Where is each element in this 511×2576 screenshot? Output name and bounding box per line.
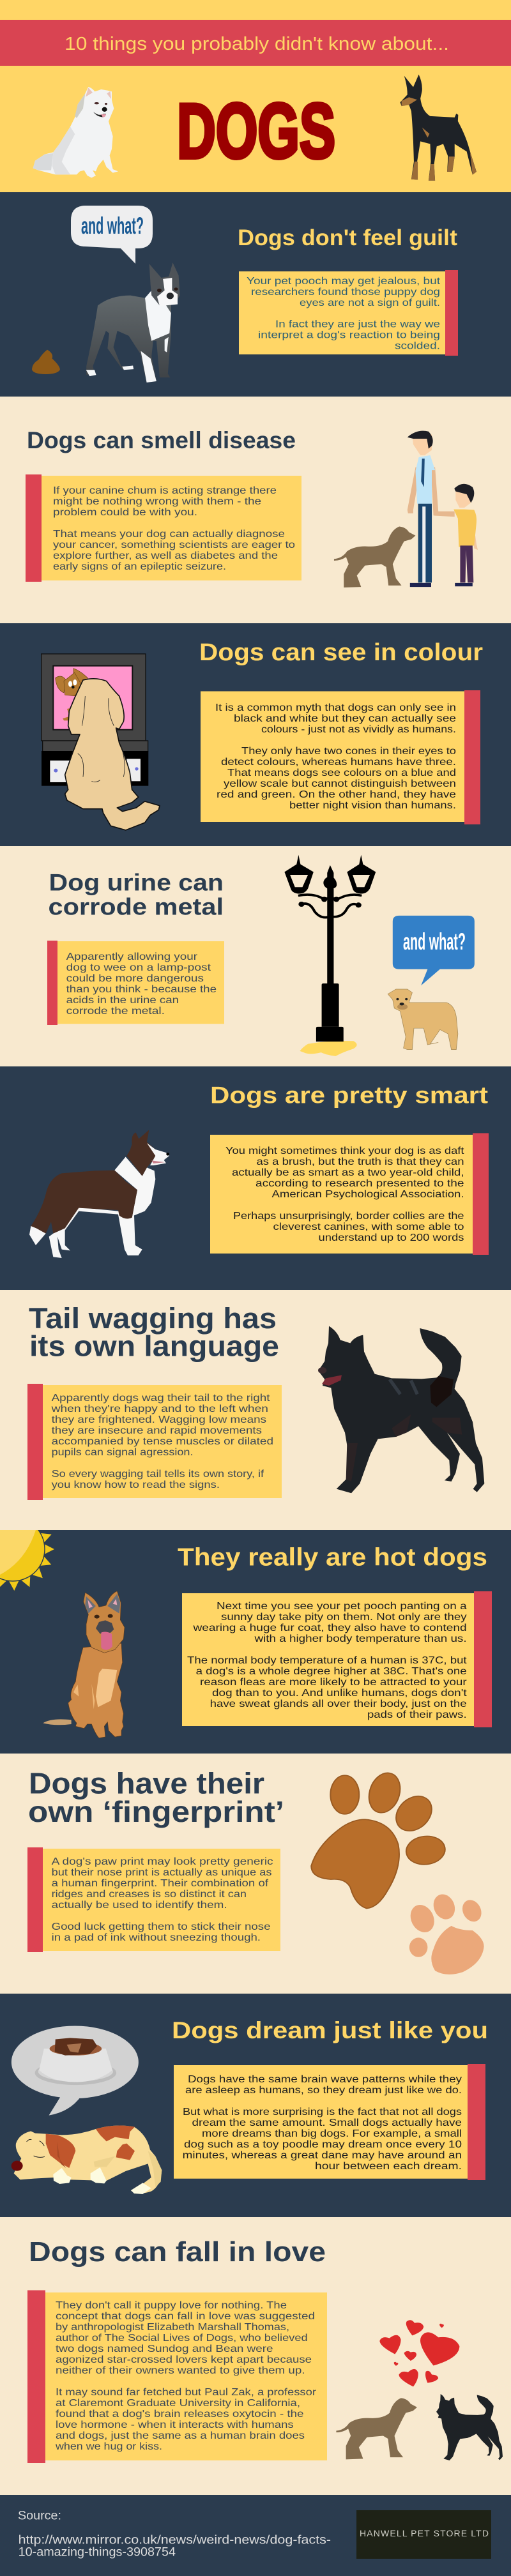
text box: are asleep as humans, so they dream just like we do. [185, 2085, 462, 2096]
text box: That means dogs see colours on a blue and [227, 768, 456, 778]
text box: in a pad of ink without sneezing though. [52, 1932, 261, 1943]
panel: dogs are pretty smart [0, 1066, 511, 1290]
text box: black and white but they can actually see [234, 713, 456, 724]
source text [18, 2510, 331, 2559]
text box: American Psychological Association. [272, 1189, 464, 1200]
heading: Dogs are pretty smart [210, 1082, 488, 1109]
icon: sun [0, 1530, 54, 1591]
text box: ridges and creases is so distinct it can [52, 1889, 247, 1900]
panel: dogs don't feel guilt [0, 192, 511, 397]
panel: tail wagging has its own language [0, 1290, 511, 1530]
text box: by anthropologist Elizabeth Marshall Thomas, [56, 2322, 289, 2333]
panel: dogs can smell disease [0, 397, 511, 623]
text box: In fact they are just the way we [275, 319, 440, 330]
heading: own ‘fingerprint’ [28, 1795, 284, 1828]
icon: border collie [29, 1130, 169, 1258]
text box: understand up to 200 words [318, 1232, 464, 1243]
text box: found that a dog's brain releases oxytocin - the [56, 2409, 304, 2420]
text box: Next time you see your pet pooch panting on a [217, 1601, 467, 1612]
text box: hour between each dream. [315, 2161, 462, 2172]
icon: thought bubble with food bowl [11, 2026, 139, 2116]
text box: scolded. [395, 341, 440, 351]
panel: footer [0, 2495, 511, 2576]
heading: corrode metal [49, 894, 224, 920]
icon: brown dog [336, 2398, 417, 2459]
text box [174, 2064, 485, 2180]
source text: 10-amazing-things-3908754 [19, 2546, 176, 2559]
icon: large brown paw print [311, 1771, 449, 1909]
text box: when we hug or kiss. [55, 2441, 162, 2452]
text box: You might sometimes think your dog is as daft [225, 1146, 464, 1156]
text box [27, 2290, 327, 2463]
text box: your cancer, something scientists are eager to [53, 540, 295, 550]
icon: tan dog [388, 989, 458, 1050]
text box: minutes, whereas a great dane may have around an [183, 2150, 462, 2161]
panel: header [0, 0, 511, 192]
text box: neither of their owners wanted to give them up. [56, 2365, 305, 2376]
icon: black dog [436, 2394, 503, 2460]
text box: The normal body temperature of a human is 37C, but [187, 1655, 467, 1666]
text box: agonized star-crossed lovers kept apart because [56, 2354, 312, 2365]
panel: they really are hot dogs [0, 1530, 492, 1738]
heading: Dogs have their [29, 1766, 264, 1799]
text box: wearing a huge fur coat, they also have to contend [192, 1623, 467, 1633]
text box: Good luck getting them to stick their nose [52, 1921, 271, 1932]
text box: Apparently allowing your [66, 951, 198, 962]
text box [182, 1591, 492, 1727]
text box: It may sound far fetched but Paul Zak, a professor [56, 2387, 317, 2398]
text box: dog such as a toy poodle may dream once every 10 [184, 2139, 462, 2150]
text box: when they're happy and to the left when [50, 1404, 268, 1414]
text box: at Claremont Graduate University in California, [56, 2398, 300, 2409]
source text: Source: [18, 2510, 61, 2523]
text box: actually be used to identify them. [52, 1900, 227, 1911]
text box: So every wagging tail tells its own story, if [52, 1469, 264, 1480]
heading: Dogs dream just like you [172, 2017, 488, 2043]
speech bubble: and what? [71, 206, 153, 264]
heading: They really are hot dogs [178, 1544, 487, 1572]
panel: dogs have their own fingerprint [0, 1754, 511, 1994]
icon: small peach paw print [407, 1893, 484, 1974]
text box: They don't call it puppy love for nothing. The [56, 2300, 287, 2311]
text box: dog than to you. And unlike humans, dogs don't [212, 1688, 467, 1699]
icon: urine puddle [300, 1041, 357, 1056]
icon: man, boy and brown dog [334, 431, 478, 587]
text box: more dreams than big dogs. For example, a small [202, 2128, 462, 2139]
text box: as a brush, but the truth is that they can [257, 1156, 464, 1167]
text box: but their nose print is actually as unique as [52, 1867, 271, 1878]
icon: boston terrier dog [86, 262, 180, 383]
text box: A dog's paw print may look pretty generic [52, 1856, 273, 1867]
text box: and dogs, just the same as a human brain does [56, 2430, 305, 2441]
text box: might be nothing wrong with them - the [53, 496, 261, 507]
text box: Dogs have the same brain wave patterns while they [188, 2074, 462, 2085]
icon: dog watching television [42, 654, 160, 830]
title: DOGS [177, 87, 335, 174]
text box [239, 270, 458, 356]
heading [49, 870, 224, 920]
text box: a dog's is a whole degree higher at 38C. That's one [196, 1666, 467, 1677]
heading: Dogs can smell disease [27, 427, 296, 453]
heading: Tail wagging has [29, 1302, 277, 1335]
text box: pupils can signal agression. [52, 1447, 193, 1458]
speech bubble: and what?: and what? [81, 213, 144, 239]
text box: If your canine chum is acting strange there [53, 485, 277, 496]
heading: Dog urine can [49, 870, 224, 895]
text box: two dogs named Sundog and Bean were [56, 2344, 273, 2354]
text box: red and green. On the other hand, they have [217, 789, 456, 800]
text box: they are frightened. Wagging low means [52, 1414, 266, 1425]
text box: a human fingerprint. Their combination of [52, 1878, 269, 1889]
text box: That means your dog can actually diagnose [53, 529, 285, 540]
heading [29, 1302, 279, 1363]
heading: Dogs can fall in love [29, 2236, 326, 2268]
text box: dream the same amount. Small dogs actually have [192, 2118, 462, 2128]
icon: black doberman dog [400, 75, 477, 181]
text box [201, 690, 480, 824]
text box: with a higher body temperature than us. [254, 1633, 467, 1644]
text box: eyes are not a sign of guilt. [300, 298, 440, 308]
text box: acids in the urine can [66, 995, 179, 1006]
speech bubble: and what? [393, 916, 475, 985]
text box [27, 1847, 280, 1952]
text box: explore further, as well as diabetes and the [53, 550, 278, 561]
heading: Dogs don't feel guilt [238, 225, 457, 250]
subtitle: 10 things you probably didn't know about... [65, 34, 449, 54]
heading [28, 1766, 284, 1828]
text box [210, 1133, 489, 1255]
text box: better night vision than humans. [289, 800, 456, 811]
text box: reason fleas are more likely to be attracted to your [200, 1677, 467, 1688]
icon: hearts [379, 2320, 459, 2386]
text box: colours - just not as vividly as humans. [261, 724, 456, 735]
panel: dogs can see in colour [0, 623, 511, 846]
panel: dogs can fall in love [0, 2217, 511, 2495]
text box: Apparently dogs wag their tail to the right [52, 1393, 270, 1404]
text box [47, 941, 224, 1025]
heading: its own language [29, 1330, 279, 1363]
text box: concept that dogs can fall in love was suggested [56, 2311, 315, 2322]
panel: dog urine can corrode metal [0, 846, 511, 1066]
icon: poop [32, 350, 60, 374]
text box: you know how to read the signs. [52, 1480, 220, 1490]
text box: early signs of an epileptic seizure. [53, 561, 226, 572]
text box: cleverest canines, with some able to [273, 1222, 464, 1232]
logo: hanwell pet store [356, 2510, 491, 2559]
text box: than you think - because the [66, 984, 217, 995]
text box: according to research presented to the [256, 1178, 464, 1189]
text box: interpret a dog's reaction to being [258, 330, 440, 341]
panel: dogs dream just like you [0, 1994, 511, 2217]
text box: Perhaps unsurprisingly, border collies are the [233, 1211, 464, 1222]
text box: detect colours, whereas humans have three. [221, 757, 456, 768]
text box [26, 474, 301, 582]
source text: http://www.mirror.co.uk/news/weird-news/dog-facts- [19, 2534, 331, 2547]
icon: white samoyed dog [33, 87, 118, 178]
text box: actually be as smart as a two year-old child, [232, 1167, 464, 1178]
text box: researchers found those puppy dog [251, 287, 440, 298]
text box: Your pet pooch may get jealous, but [247, 276, 441, 287]
text box [27, 1384, 282, 1500]
text box: yellow scale but cannot distinguish between [224, 778, 456, 789]
text box: corrode the metal. [66, 1006, 165, 1017]
text box: sunny day take pity on them. Not only are they [221, 1612, 467, 1623]
text box: author of The Social Lives of Dogs, who believed [56, 2333, 308, 2344]
text box: They only have two cones in their eyes to [241, 746, 456, 757]
icon: black dog [318, 1326, 484, 1493]
text box: problem could be with you. [53, 507, 197, 518]
icon: sleeping dog [11, 2125, 162, 2194]
icon: german shepherd [43, 1591, 125, 1738]
text box: pads of their paws. [367, 1709, 467, 1720]
logo: hanwell pet store: HANWELL PET STORE LTD [360, 2528, 489, 2538]
text box: But what is more surprising is the fact that not all dogs [183, 2107, 462, 2118]
icon: lamp post [284, 855, 376, 1042]
text box: dog to wee on a lamp-post [66, 962, 211, 973]
text box: love hormone - when it interacts with humans [56, 2420, 294, 2430]
heading: Dogs can see in colour [199, 639, 483, 666]
text box: they are insecure and rapid movements [52, 1425, 262, 1436]
text box: have sweat glands all over their body, just on the [210, 1699, 467, 1709]
text box: could be more dangerous [66, 973, 204, 984]
text box: It is a common myth that dogs can only see in [215, 702, 456, 713]
text box: accompanied by tense muscles or dilated [52, 1436, 273, 1447]
